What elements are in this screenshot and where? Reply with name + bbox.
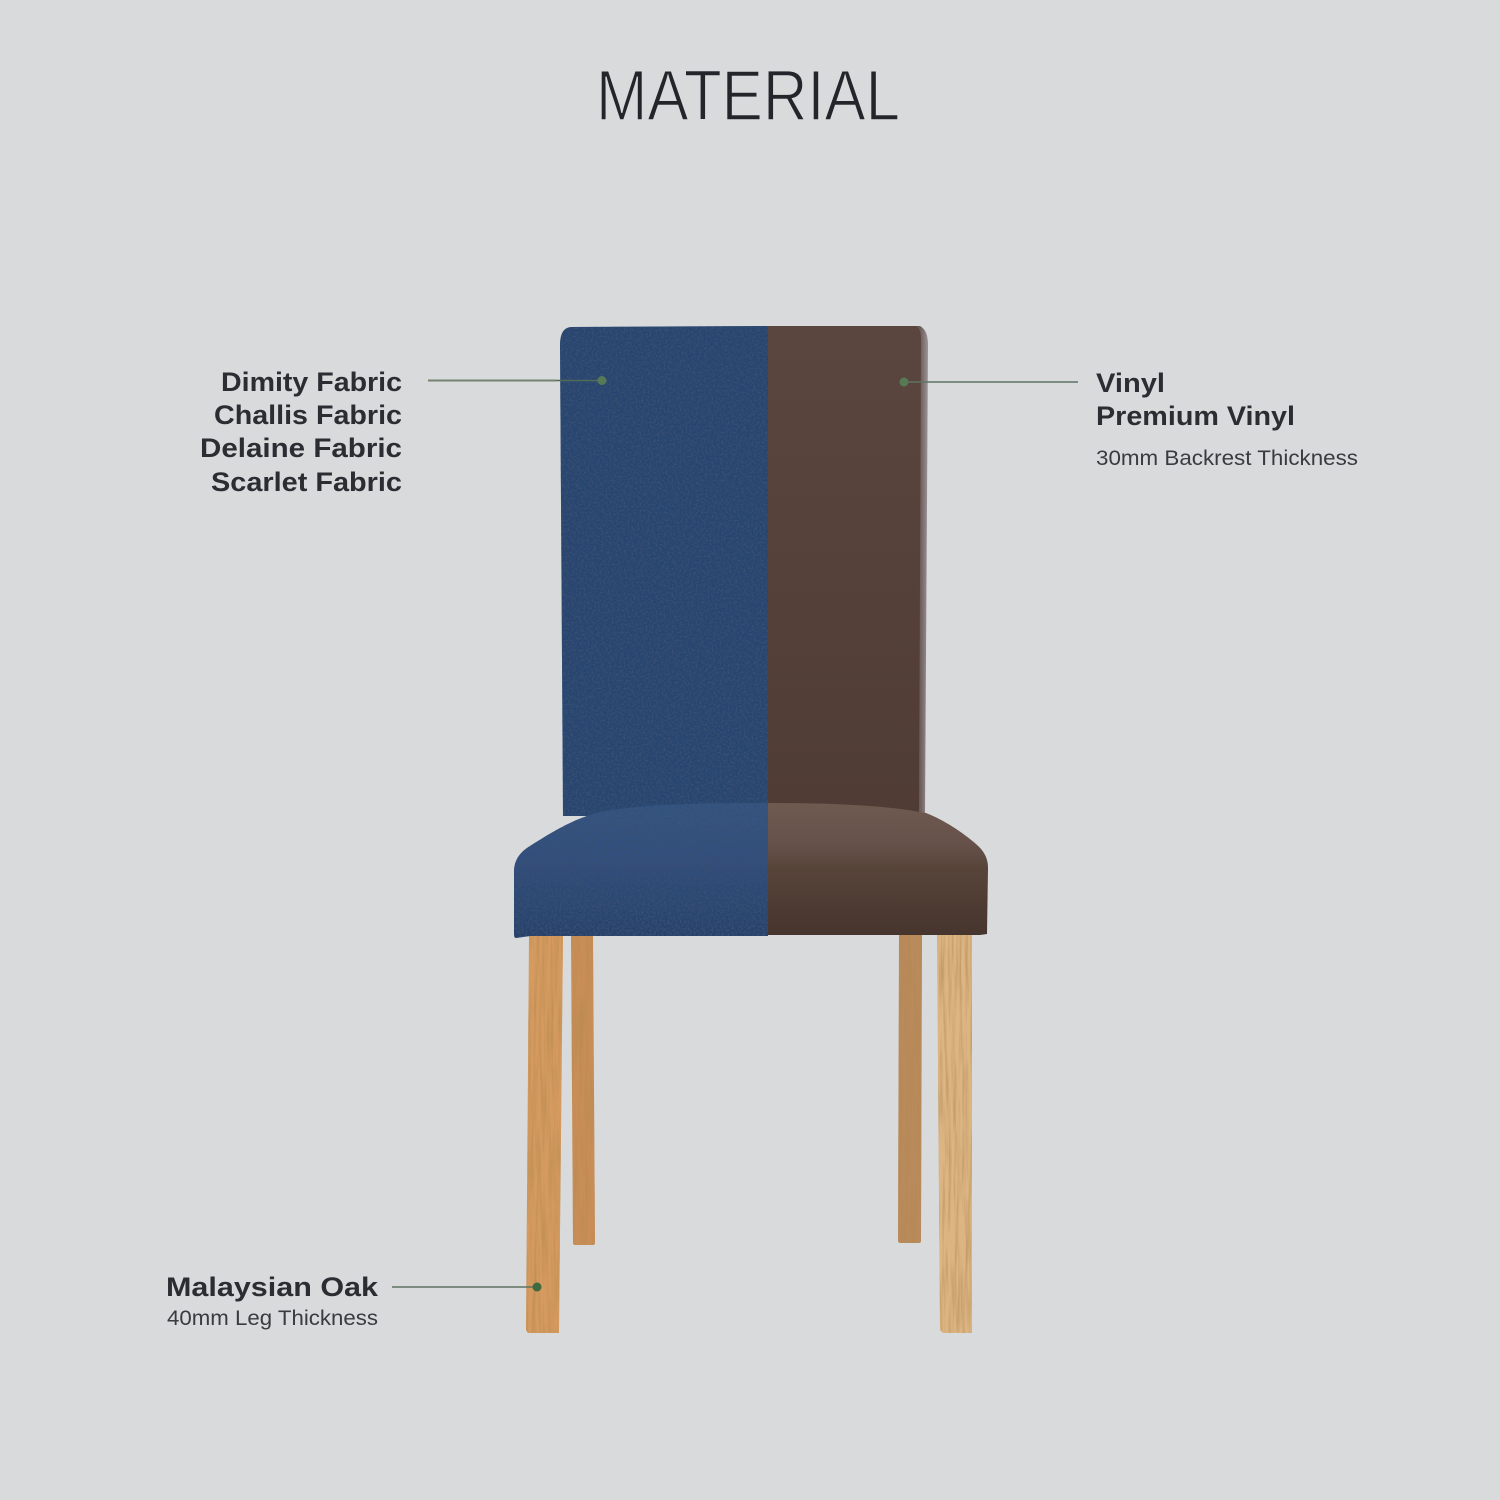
back left leg — [571, 934, 595, 1245]
back right leg — [898, 934, 922, 1243]
front left leg — [526, 936, 563, 1333]
callout: vinyl options — [900, 368, 1358, 470]
backrest: vinyl half — [768, 326, 921, 816]
callout: leg material — [166, 1272, 542, 1330]
backrest: vinyl side strip — [912, 326, 928, 814]
seat: vinyl half — [768, 803, 988, 935]
vinyl list: Premium Vinyl — [1096, 401, 1295, 431]
chair illustration — [514, 326, 988, 1333]
vinyl list: Vinyl — [1096, 368, 1165, 398]
fabric list: Dimity Fabric — [221, 367, 402, 397]
title: MATERIAL — [596, 57, 900, 136]
backrest: fabric half — [560, 326, 768, 816]
front right leg — [937, 934, 972, 1333]
leg thickness: 40mm Leg Thickness — [167, 1307, 378, 1330]
oak label: Malaysian Oak — [166, 1272, 379, 1302]
fabric list — [200, 367, 402, 497]
fabric list: Challis Fabric — [214, 400, 402, 430]
fabric list: Scarlet Fabric — [211, 467, 402, 497]
leader line: vinyl — [900, 378, 1078, 386]
seat: fabric half — [514, 803, 768, 938]
callout: fabric options — [200, 367, 606, 497]
leader line: oak — [392, 1282, 542, 1292]
fabric list: Delaine Fabric — [200, 433, 402, 463]
vinyl list — [1096, 368, 1295, 431]
backrest thickness: 30mm Backrest Thickness — [1096, 447, 1358, 470]
leader line: fabric — [428, 376, 606, 385]
